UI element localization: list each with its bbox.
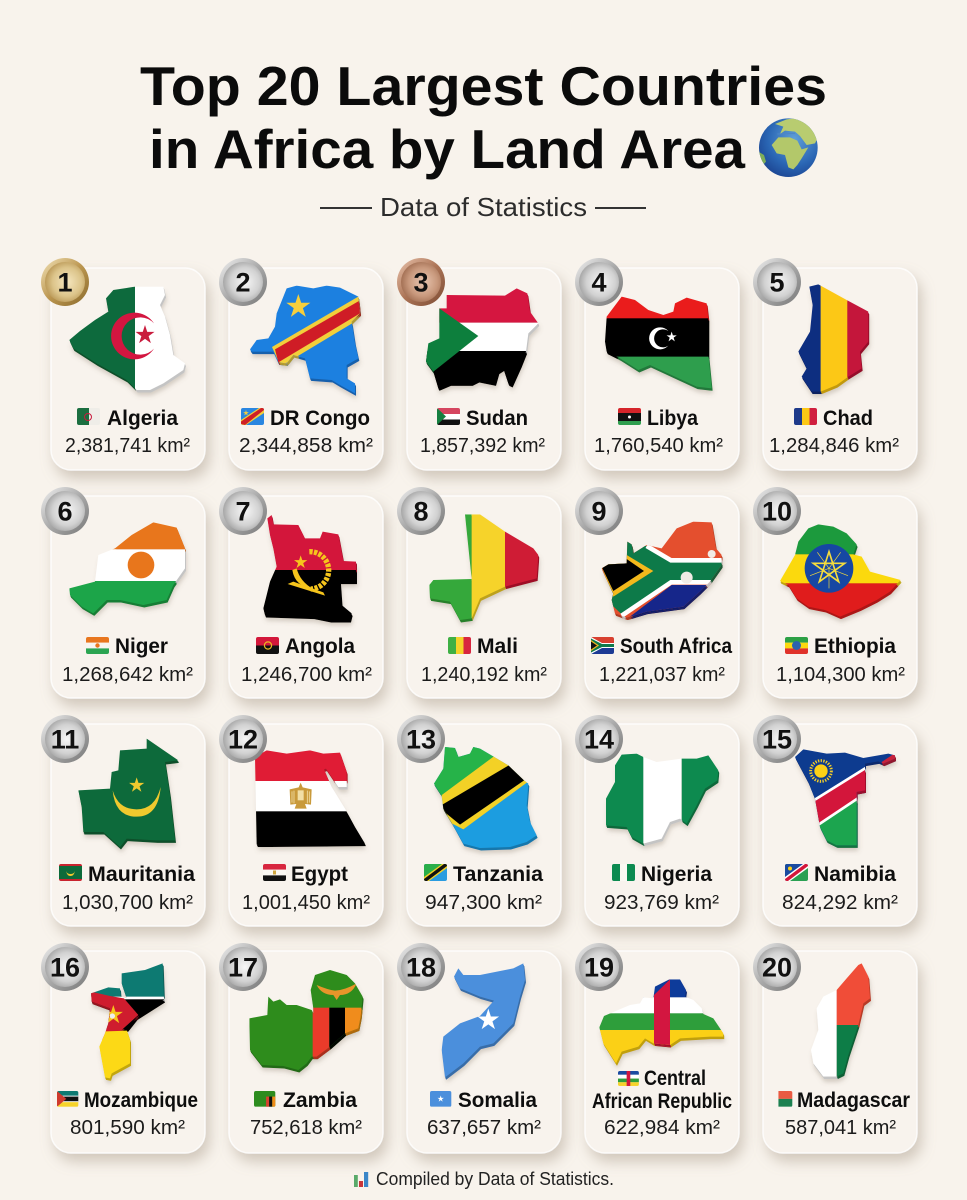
icon: Zambia flag	[254, 1091, 275, 1107]
panel: Zambia	[229, 951, 383, 1153]
badge: rank 15: 15	[762, 724, 792, 754]
panel: Egypt: 1,001,450 km²	[242, 892, 370, 914]
badge: rank 7	[219, 487, 267, 535]
icon: Libya flag	[618, 408, 641, 425]
icon: Angola flag	[256, 637, 279, 654]
icon: Mozambique flag	[57, 1091, 78, 1107]
map: Ethiopia	[777, 518, 903, 620]
badge: rank 14	[575, 715, 623, 763]
panel: Central African Republic: 622,984 km²	[604, 1117, 720, 1139]
badge: rank 20	[753, 943, 801, 991]
badge: rank 17	[219, 943, 267, 991]
map: South Africa	[597, 518, 727, 625]
panel: Algeria	[51, 268, 205, 470]
badge: rank 10: 10	[762, 496, 792, 526]
badge: rank 15	[753, 715, 801, 763]
panel: Ethiopia: Ethiopia	[814, 635, 896, 658]
badge: rank 13	[397, 715, 445, 763]
map: Nigeria	[600, 745, 723, 852]
panel: Namibia: 824,292 km²	[782, 892, 898, 914]
badge: rank 18: 18	[406, 952, 436, 982]
footer text: Compiled by Data of Statistics.	[376, 1169, 614, 1189]
panel: Tanzania: 947,300 km²	[425, 892, 542, 914]
map: Somalia	[437, 960, 530, 1080]
icon: Ethiopia flag	[785, 637, 808, 654]
map: Algeria	[63, 282, 192, 395]
panel: Ethiopia	[763, 496, 917, 698]
panel: Ethiopia: 1,104,300 km²	[776, 664, 905, 686]
badge: rank 17: 17	[228, 952, 258, 982]
panel: Libya: Libya	[647, 407, 698, 430]
panel: South Africa	[585, 496, 739, 698]
panel: Mozambique	[51, 951, 205, 1153]
panel: Zambia: 752,618 km²	[250, 1117, 362, 1139]
map: Namibia	[790, 745, 900, 852]
map: Zambia	[243, 967, 367, 1073]
icon: Tanzania flag	[424, 864, 447, 881]
map: Madagascar	[807, 960, 873, 1080]
panel: Central African Republic: Central	[644, 1067, 706, 1090]
panel: Mauritania: 1,030,700 km²	[62, 892, 193, 914]
badge: rank 6: 6	[57, 496, 73, 526]
panel: Algeria: 2,381,741 km²	[65, 435, 190, 457]
badge: rank 8: 8	[413, 496, 429, 526]
icon: Algeria flag	[77, 408, 100, 425]
map: Egypt	[250, 745, 370, 848]
icon: Chad flag	[794, 408, 817, 425]
panel: Mauritania	[51, 724, 205, 926]
badge: rank 3: 3	[413, 268, 429, 298]
panel: DR Congo: DR Congo	[270, 407, 370, 430]
panel: Namibia: Namibia	[814, 863, 896, 886]
panel: Mali: Mali	[477, 635, 518, 658]
panel: Chad: Chad	[823, 407, 873, 430]
panel: Somalia	[407, 951, 561, 1153]
badge: rank 20: 20	[762, 952, 792, 982]
panel: Algeria: Algeria	[107, 407, 178, 430]
panel: Niger	[51, 496, 205, 698]
badge: rank 6	[41, 487, 89, 535]
panel: Mozambique: Mozambique	[84, 1089, 198, 1112]
panel: Egypt: Egypt	[291, 863, 348, 886]
badge: rank 19	[575, 943, 623, 991]
panel: Libya: 1,760,540 km²	[594, 435, 723, 457]
badge: rank 16: 16	[50, 952, 80, 982]
badge: rank 7: 7	[235, 496, 251, 526]
badge: rank 5: 5	[769, 268, 785, 298]
map: Mozambique	[87, 960, 170, 1080]
panel: Nigeria: Nigeria	[641, 863, 712, 886]
badge: rank 2: 2	[235, 268, 251, 298]
badge: rank 1: 1	[57, 268, 73, 298]
icon: Somalia flag	[430, 1091, 451, 1107]
icon: Niger flag	[86, 637, 109, 654]
badge: rank 11: 11	[51, 724, 79, 754]
map: Tanzania	[430, 742, 540, 852]
title: in Africa by Land Area	[149, 118, 745, 180]
panel: Somalia: Somalia	[458, 1089, 537, 1112]
panel: Niger: 1,268,642 km²	[62, 664, 193, 686]
badge: rank 2	[219, 258, 267, 306]
panel: DR Congo	[229, 268, 383, 470]
panel: Madagascar: Madagascar	[797, 1089, 910, 1112]
map: DR Congo	[243, 282, 363, 397]
panel: Zambia: Zambia	[283, 1089, 357, 1112]
panel: Namibia	[763, 724, 917, 926]
panel: Madagascar	[763, 951, 917, 1153]
badge: rank 13: 13	[406, 724, 436, 754]
panel: Somalia: 637,657 km²	[427, 1117, 541, 1139]
map: Niger	[63, 518, 190, 618]
panel: Egypt	[229, 724, 383, 926]
badge: rank 14: 14	[584, 724, 614, 754]
badge: rank 8	[397, 487, 445, 535]
map: Central African Republic	[593, 973, 730, 1067]
panel: Nigeria: 923,769 km²	[604, 892, 719, 914]
icon: Namibia flag	[785, 864, 808, 881]
icon: DR Congo flag	[241, 408, 264, 425]
panel: Niger: Niger	[115, 635, 168, 658]
panel: Nigeria	[585, 724, 739, 926]
badge: rank 5	[753, 258, 801, 306]
panel: Mauritania: Mauritania	[88, 863, 195, 886]
map: Mali	[427, 512, 542, 625]
panel: Tanzania	[407, 724, 561, 926]
map: Mauritania	[73, 735, 183, 852]
panel: Libya	[585, 268, 739, 470]
badge: rank 10	[753, 487, 801, 535]
panel: Central African Republic: African Republic	[592, 1090, 732, 1113]
icon: Mali flag	[448, 637, 471, 654]
badge: rank 3	[397, 258, 445, 306]
panel: Central African Republic	[585, 951, 739, 1153]
panel: Madagascar: 587,041 km²	[785, 1117, 896, 1139]
badge: rank 11	[41, 715, 89, 763]
panel: Angola: 1,246,700 km²	[241, 664, 372, 686]
panel: Chad: 1,284,846 km²	[769, 435, 899, 457]
icon: Sudan flag	[437, 408, 460, 426]
subtitle: Data of Statistics	[380, 192, 587, 222]
title	[140, 55, 827, 180]
icon: Central African Republic flag	[618, 1071, 639, 1086]
badge: rank 12: 12	[228, 724, 258, 754]
panel: Angola	[229, 496, 383, 698]
badge: rank 19: 19	[584, 952, 614, 982]
map: Libya	[600, 292, 717, 393]
badge: rank 18	[397, 943, 445, 991]
badge: rank 9	[575, 487, 623, 535]
map: Angola	[260, 512, 360, 623]
icon: Mauritania flag	[59, 864, 82, 881]
badge: rank 1	[41, 258, 89, 306]
icon: South Africa flag	[591, 637, 614, 654]
panel: Sudan: 1,857,392 km²	[420, 435, 545, 457]
map: Sudan	[420, 285, 543, 393]
title: Top 20 Largest Countries	[140, 55, 827, 117]
panel: Angola: Angola	[285, 635, 355, 658]
badge: rank 16	[41, 943, 89, 991]
panel: Mali	[407, 496, 561, 698]
badge: rank 9: 9	[591, 496, 607, 526]
icon: globe	[759, 118, 818, 177]
badge: rank 4: 4	[591, 268, 607, 298]
panel: Mozambique: 801,590 km²	[70, 1117, 185, 1139]
panel: Mali: 1,240,192 km²	[421, 664, 547, 686]
panel: South Africa: 1,221,037 km²	[599, 664, 725, 686]
icon: bar chart	[354, 1172, 368, 1187]
badge: rank 12	[219, 715, 267, 763]
panel: DR Congo: 2,344,858 km²	[239, 435, 373, 457]
icon: Egypt flag	[263, 864, 286, 881]
badge: rank 4	[575, 258, 623, 306]
panel: Sudan	[407, 268, 561, 470]
map: Chad	[793, 282, 872, 395]
panel: South Africa: South Africa	[620, 635, 732, 658]
icon: Madagascar flag	[771, 1091, 792, 1107]
panel: Chad	[763, 268, 917, 470]
panel: Tanzania: Tanzania	[453, 863, 543, 886]
panel: Sudan: Sudan	[466, 407, 528, 430]
icon: Nigeria flag	[612, 864, 635, 881]
